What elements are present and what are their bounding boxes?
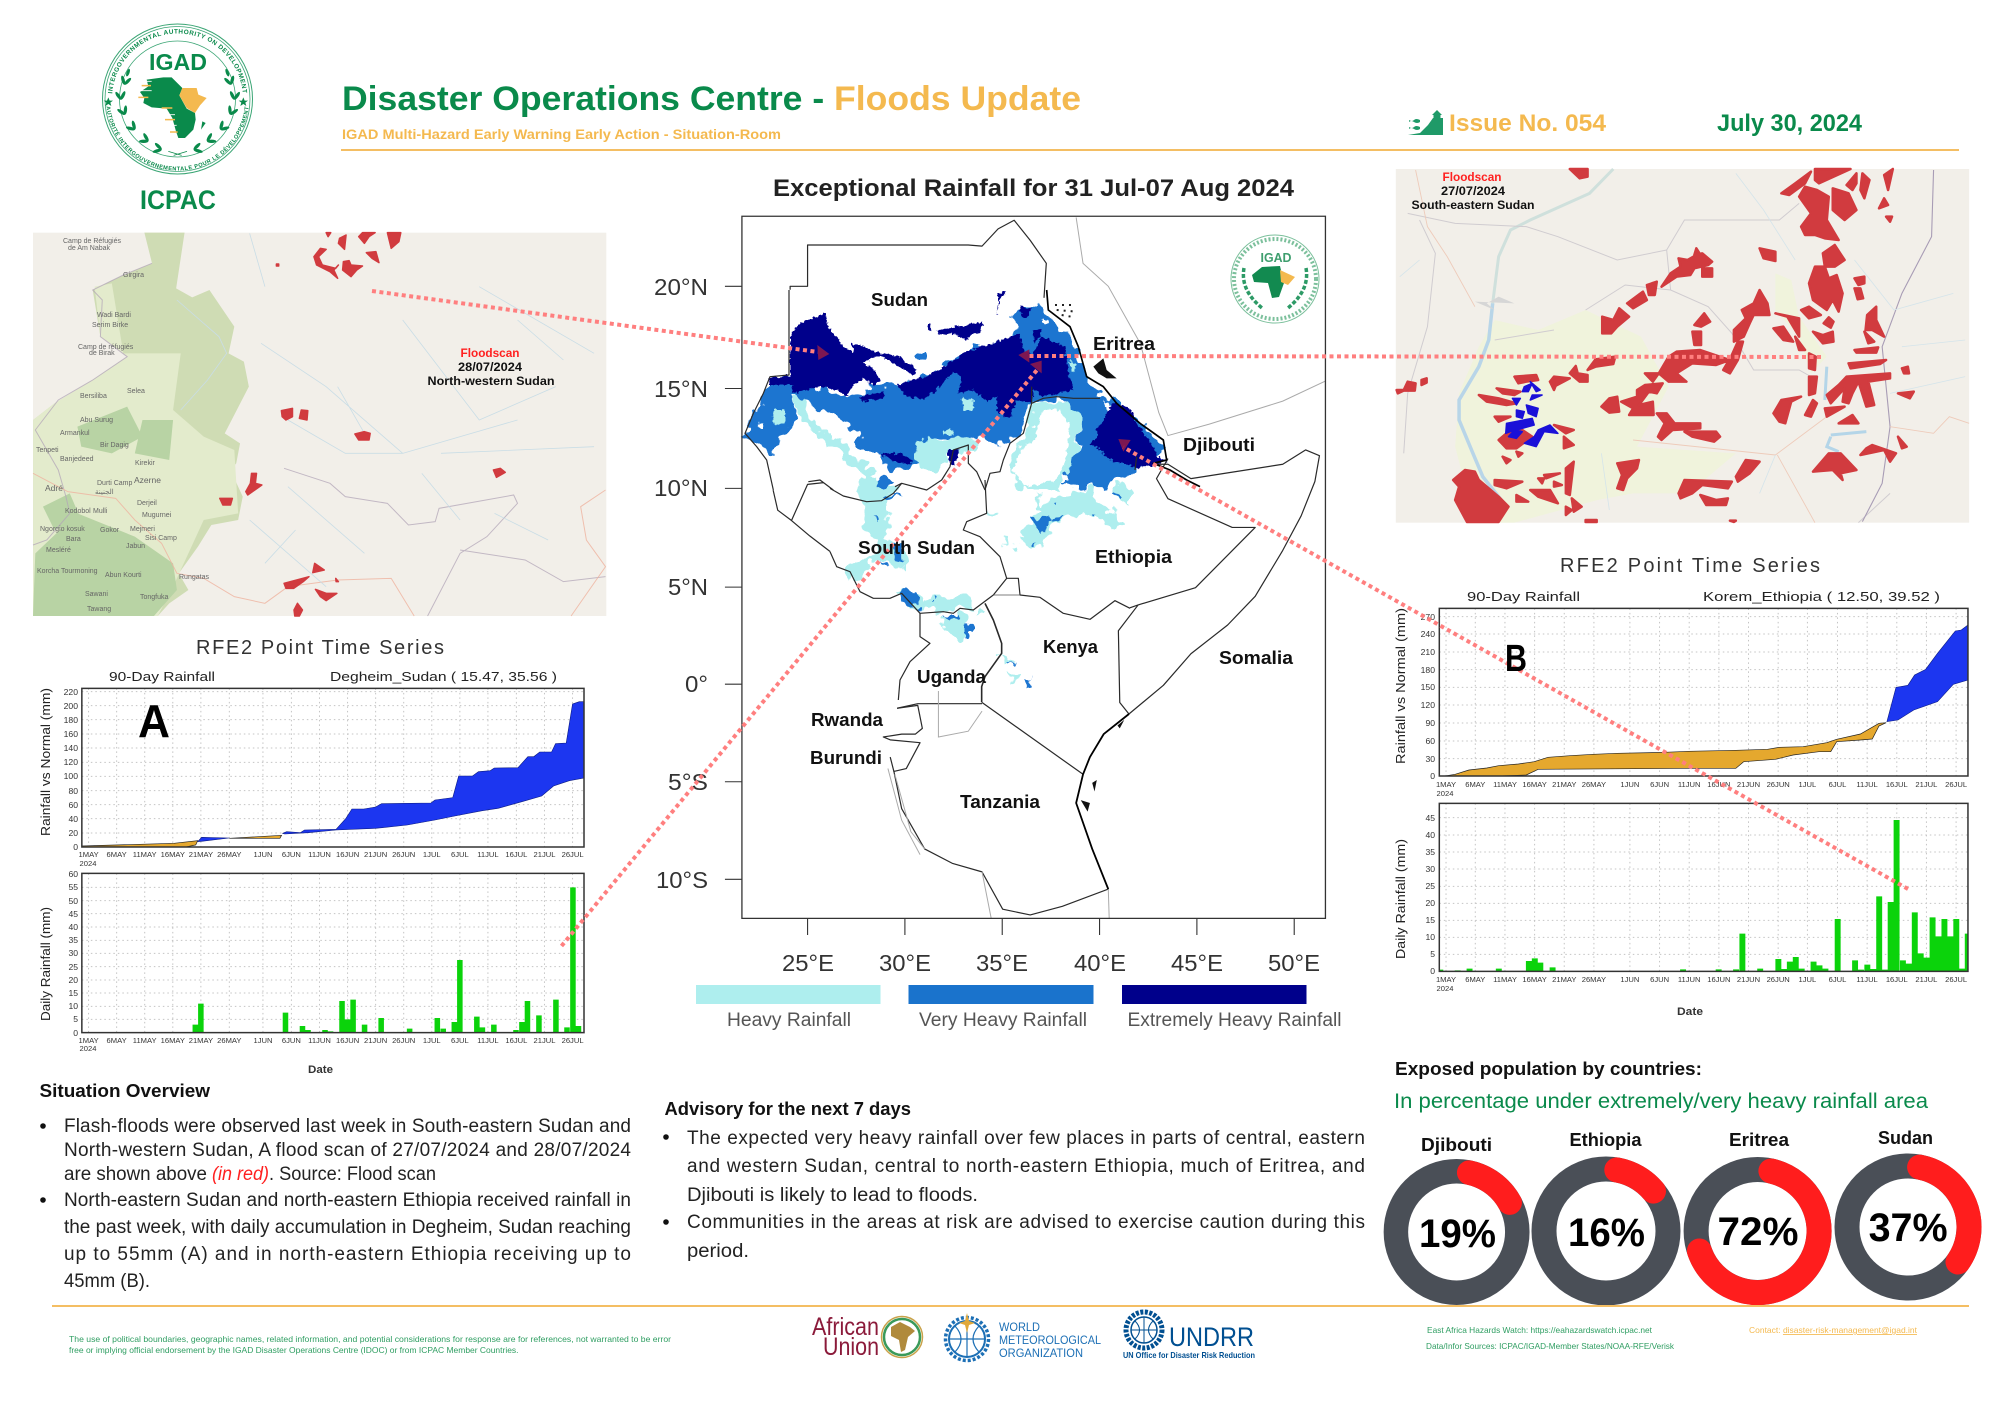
panel: chart A Degheim: 180 [64,715,78,725]
donut: Eritrea: 72% [1718,1210,1798,1254]
panel: chart A Degheim: 20 [68,975,78,985]
map country labels: Kenya [1043,637,1099,657]
logo: African Union: Union [823,1333,879,1361]
panel: floodscan map north-western Sudan: de Am Nabak [68,245,111,252]
axis tick labels chart B: 16MAY [1522,780,1547,789]
map axis labels: 5°N [668,574,708,600]
axis tick labels chart A: 16JUN [336,850,359,859]
panel: chart A Degheim: 0 [73,842,78,852]
panel: chart A Degheim: 80 [68,786,78,796]
axis tick labels chart B: 26JUN [1767,975,1790,984]
axis tick labels chart A: 26JUN [392,1036,415,1045]
heading: Advisory for the next 7 days [664,1098,911,1119]
legend: Extremely Heavy Rainfall [1128,1010,1342,1031]
rainfall: heavy [793,398,1130,685]
logo: African Union: African [812,1313,879,1341]
axis tick labels chart A: 26JUN [392,850,415,859]
panel: chart B Korem: 90 [1425,718,1435,728]
panel: floodscan map north-western Sudan: Sisi Camp [145,535,177,542]
map axis labels: 10°N [654,475,708,501]
donut: Djibouti: 19% [1419,1212,1496,1256]
panel: chart B Korem: 35 [1425,847,1435,857]
map axis labels: 10°S [656,867,708,893]
disclaimer: free or implying official endorsement by the IGAD Disaster Operations Centre (IDOC) or from ICPAC Member Countries. [69,1345,518,1355]
panel: chart B Korem: 270 [1421,612,1435,622]
map axis labels: 45°E [1171,950,1223,976]
axis titles chart A: Date [308,1064,333,1076]
panel: floodscan map south-eastern Sudan [1396,169,1969,523]
axis titles chart B: Daily Rainfall (mm) [1393,839,1408,959]
donut: Djibouti [1396,1134,1517,1293]
disclaimer: The use of political boundaries, geographic names, related information, and potential considerations for response are for references, not warranted to be error [69,1334,671,1344]
panel: chart B Korem: 15 [1425,915,1435,925]
panel: floodscan map north-western Sudan: Banjedeed [60,456,94,463]
map country labels: Eritrea [1093,334,1156,354]
panel: floodscan map north-western Sudan: Kodobol [65,508,91,515]
axis tick labels chart A: 16MAY [161,1036,185,1045]
legend [696,985,1342,1031]
axis tick labels chart B: 11MAY [1493,780,1517,789]
axis tick labels chart A: 11MAY [133,1036,157,1045]
panel: floodscan map north-western Sudan: Tawang [87,606,111,613]
rainfall: gaps inside very heavy [758,318,1122,435]
axis tick labels chart B: 11JUL [1856,975,1878,984]
axis tick labels chart B: 1MAY [1436,975,1456,984]
axis tick labels chart B: 21MAY [1552,780,1576,789]
axis tick labels chart B: 1MAY [1436,780,1456,789]
axis tick labels chart B: 6JUN [1650,975,1669,984]
donut: Eritrea [1696,1129,1819,1293]
panel: advisory: The expected very heavy rainfall over few places in parts of central, eastern [687,1128,1365,1149]
subheading: In percentage under extremely/very heavy rainfall area [1394,1090,1928,1113]
panel: situation overview: North-western Sudan, A flood scan of 27/07/2024 and 28/07/2024 [64,1140,631,1161]
axis tick labels chart A: 26MAY [217,1036,241,1045]
title: Disaster Operations Centre - Floods Update [342,80,1081,118]
panel: floodscan map north-western Sudan: Abu Surug [80,417,113,424]
map country labels [810,290,1294,812]
map label: Floodscan north-western Sudan: Floodscan [460,348,520,360]
axis tick labels chart B: 26MAY [1582,780,1606,789]
panel: floodscan map north-western Sudan: الجنينة [95,488,114,496]
axis tick labels chart A: 6JUN [282,850,301,859]
axis tick labels chart A: 16JUL [505,1036,527,1045]
map inset logo [1231,235,1319,323]
axis tick labels chart B: 16JUN [1707,780,1731,789]
axis tick labels chart A: 2024 [80,859,96,868]
panel: chart A Degheim: 160 [64,729,78,739]
axis tick labels chart A: 21JUL [534,1036,555,1045]
arrow: north-western Sudan to map [372,291,818,352]
panel: chart B Korem: 10 [1425,932,1435,942]
donut: Djibouti: Djibouti [1421,1134,1492,1155]
footer links: Data/Infor Sources: ICPAC/IGAD-Member States/NOAA-RFE/Verisk [1426,1341,1675,1351]
footer links: Contact: disaster-risk-management@igad.int [1749,1325,1918,1335]
map label: Floodscan south-eastern Sudan: 27/07/2024 [1441,186,1506,198]
panel: chart B Korem: 180 [1421,665,1435,675]
axis tick labels chart A: 21JUL [534,850,555,859]
axis tick labels chart A: 26JUL [562,1036,584,1045]
axis tick labels chart A: 21MAY [189,850,213,859]
subtitle: IGAD Multi-Hazard Early Warning Early Action - Situation-Room [342,126,781,142]
donut: Eritrea: Eritrea [1729,1129,1790,1150]
panel: floodscan map north-western Sudan: Camp de Réfugiés [63,238,121,245]
panel: situation overview: the past week, with daily accumulation in Degheim, Sudan reaching [64,1217,631,1238]
axis tick labels chart B: 16JUN [1707,975,1731,984]
axis tick labels chart A: 6JUL [451,850,469,859]
panel: chart B Korem: 0 [1430,966,1435,976]
panel: floodscan map north-western Sudan: Bara [66,536,81,543]
panel: chart B Korem: 30 [1425,864,1435,874]
panel: floodscan map north-western Sudan: de Birak [89,350,115,357]
axis tick labels chart A: 1JUL [423,850,441,859]
axis tick labels chart A: 6MAY [107,1036,127,1045]
panel: floodscan map north-western Sudan: Mesléré [46,547,71,554]
donut: Ethiopia: Ethiopia [1570,1129,1642,1150]
panel: floodscan map north-western Sudan: Selea [127,388,145,395]
map axis labels: 50°E [1268,950,1320,976]
axis tick labels chart B: 21JUN [1737,975,1760,984]
map axis labels: 40°E [1074,950,1126,976]
issue number: Issue No. 054 [1449,110,1607,137]
panel: floodscan map north-western Sudan: Sawani [85,591,108,598]
logo label: ICPAC: ICPAC [140,185,216,215]
panel: floodscan map north-western Sudan: Durti Camp [97,480,133,487]
arrow: chart A to map [562,370,1037,946]
panel: floodscan map north-western Sudan: Rungatas [179,574,209,581]
axis tick labels chart B: 1JUN [1620,780,1639,789]
axis tick labels chart A: 21JUN [364,1036,387,1045]
panel: chart A Degheim: 55 [68,882,78,892]
axis tick labels chart B: 26JUL [1945,780,1967,789]
panel: advisory: and western Sudan, central to north-eastern Ethiopia, much of Eritrea, and [687,1156,1365,1177]
panel: chart A Degheim: 140 [64,743,78,753]
panel: chart B Korem: 210 [1421,647,1435,657]
panel: chart A Degheim: 90-Day Rainfall [109,669,215,684]
panel: floodscan map north-western Sudan: Camp de réfugiés [78,344,134,351]
panel: chart B Korem [1393,555,1968,1018]
panel: chart A Degheim: 40 [68,922,78,932]
axis tick labels chart A: 2024 [80,1044,96,1053]
footer links [1426,1325,1918,1351]
map country labels: Djibouti [1183,435,1255,455]
axis tick labels chart B: 6JUL [1829,975,1846,984]
panel: floodscan map north-western Sudan: Mulli [93,508,108,515]
cumulative rainfall chart [82,688,584,847]
axis tick labels chart B: 26JUL [1945,975,1967,984]
axis tick labels chart A: 6JUL [451,1036,469,1045]
map axis labels: 30°E [879,950,931,976]
panel: exposed population [1394,1058,1969,1293]
axis tick labels chart A: 16JUL [505,850,527,859]
panel: chart A Degheim: 30 [68,948,78,958]
panel: chart B Korem: 25 [1425,881,1435,891]
axis tick labels chart A: 1JUN [254,850,272,859]
panel: floodscan map north-western Sudan: Ngorgio kosuk [40,526,85,533]
panel: floodscan map north-western Sudan [33,233,606,616]
panel: floodscan map north-western Sudan: Mejmeri [130,526,155,533]
donut: Ethiopia: 16% [1568,1211,1645,1255]
axis tick labels chart B: 16JUL [1886,780,1908,789]
panel: floodscan map north-western Sudan: Azerne [134,475,161,485]
panel: situation overview: 45mm (B). [64,1271,150,1292]
panel: chart B Korem: 45 [1425,813,1435,823]
logo: IGAD emblem [102,24,253,174]
map background [742,216,1326,918]
panel: chart A Degheim: 10 [68,1001,78,1011]
panel: chart A Degheim: 5 [73,1014,78,1024]
axis tick labels chart A: 6JUN [282,1036,301,1045]
country borders [745,220,1319,915]
axis titles chart A: Daily Rainfall (mm) [38,907,53,1021]
axis tick labels chart B: 6JUN [1650,780,1669,789]
panel: chart A Degheim: Degheim_Sudan ( 15.47, 35.56 ) [330,669,557,684]
axis tick labels chart B: 11MAY [1493,975,1517,984]
map country labels: South Sudan [858,538,975,558]
axis tick labels chart B: 1JUL [1799,975,1816,984]
panel: chart B Korem: 5 [1430,949,1435,959]
logo: UNDRR: UN Office for Disaster Risk Reduction [1123,1350,1255,1360]
chart marker A: A [138,695,170,747]
map axis labels: 25°E [782,950,834,976]
axis tick labels chart B: 21MAY [1552,975,1576,984]
axis tick labels chart A: 1MAY [79,850,99,859]
chart title: RFE2 Point Time Series [1560,555,1820,577]
map label: Floodscan south-eastern Sudan [1412,172,1534,212]
map label: Floodscan south-eastern Sudan: Floodscan [1442,172,1502,184]
panel: floodscan map north-western Sudan: Armankul [60,430,90,437]
panel: chart A Degheim: 15 [68,988,78,998]
panel: chart A Degheim: 50 [68,896,78,906]
axis tick labels chart A: 11JUL [477,850,499,859]
logo: World Meteorological Organization: WORLD [999,1320,1040,1334]
axis tick labels chart A: 1JUN [254,1036,272,1045]
panel: exceptional rainfall map [654,175,1342,1031]
panel: advisory: period. [687,1241,749,1262]
map title: Exceptional Rainfall for 31 Jul-07 Aug 2024 [773,175,1295,202]
logo: World Meteorological Organization: METEOROLOGICAL [999,1333,1101,1347]
panel: chart B Korem: 90-Day Rainfall [1467,589,1580,604]
panel: situation overview: are shown above [64,1164,207,1185]
map country labels: Burundi [810,748,882,768]
disclaimer [69,1334,671,1355]
axis tick labels chart A: 6MAY [107,850,127,859]
panel: situation overview: Flash-floods were observed last week in South-eastern Sudan and [64,1116,631,1137]
logo: IGAD emblem: INTERGOVERNMENTAL AUTHORITY ON DEVELOPMENT [108,29,248,94]
panel: floodscan map north-western Sudan: Gokor [100,527,120,534]
panel: situation overview: (in red) [212,1164,269,1185]
logo: IGAD emblem: AUTORITÉ INTERGOUVERNEMENTALE POUR LE DÉVELOPPEMENT [106,106,248,170]
axis tick labels chart A: 11JUN [308,1036,331,1045]
logo: World Meteorological Organization: ORGANIZATION [999,1346,1083,1360]
map label: Floodscan north-western Sudan: North-western Sudan [428,376,554,388]
legend: Very Heavy Rainfall [919,1010,1087,1031]
panel: chart A Degheim: 220 [64,687,78,697]
panel: chart A Degheim: 25 [68,962,78,972]
arrow: chart B to map [1123,447,1908,889]
panel: chart B Korem: 120 [1421,700,1435,710]
rainfall: very heavy [745,305,1165,687]
panel: situation overview: North-eastern Sudan and north-eastern Ethiopia received rainfall in [64,1190,631,1211]
axis tick labels chart B: 26JUN [1767,780,1790,789]
map axis labels: 35°E [976,950,1028,976]
daily rainfall bar chart [82,873,584,1033]
rainfall: extremely heavy [768,292,1167,468]
panel: chart A Degheim: 60 [68,800,78,810]
panel: chart B Korem: 0 [1430,771,1435,781]
panel: floodscan map north-western Sudan: Bir Dagig [100,442,129,449]
map country labels: Rwanda [811,710,884,730]
date: July 30, 2024 [1717,110,1863,137]
panel: floodscan map north-western Sudan: Derjeil [137,500,157,507]
map country labels: Sudan [871,290,928,310]
panel: chart A Degheim: 0 [73,1028,78,1038]
chart marker B: B [1505,638,1527,680]
arrow: south-eastern Sudan to map [1029,356,1821,357]
panel: chart B Korem: 20 [1425,898,1435,908]
panel: floodscan map north-western Sudan: Bersiliba [80,393,107,400]
axis tick labels chart B: 6JUL [1829,780,1846,789]
heading: Exposed population by countries: [1395,1058,1702,1079]
panel: chart B Korem: 40 [1425,830,1435,840]
axis tick labels chart A: 26JUL [562,850,584,859]
axis titles chart A [38,688,333,1076]
panel: chart A Degheim: 45 [68,909,78,919]
axis tick labels chart B: 6MAY [1465,780,1485,789]
map inset logo: IGAD [1260,251,1292,265]
arrow heads [817,345,1131,452]
axis tick labels chart A: 1MAY [79,1036,99,1045]
cumulative rainfall chart [1439,608,1968,776]
logo: IGAD emblem: IGAD [149,49,207,75]
panel: floodscan map north-western Sudan: Jabun [126,543,145,550]
donut: Sudan: 37% [1869,1206,1948,1250]
axis tick labels chart A: 16JUN [336,1036,359,1045]
axis tick labels chart B: 16JUL [1886,975,1908,984]
panel: advisory: Communities in the areas at risk are advised to exercise caution during this [687,1212,1365,1233]
map label: Floodscan north-western Sudan: 28/07/2024 [458,362,523,374]
axis tick labels chart B: 21JUL [1915,780,1937,789]
axis tick labels chart A: 26MAY [217,850,241,859]
axis tick labels chart A: 11MAY [133,850,157,859]
axis tick labels chart B: 26MAY [1582,975,1606,984]
donut: Sudan [1847,1127,1969,1288]
axis tick labels chart A [79,850,584,1053]
panel: advisory [663,1098,1365,1262]
map axis labels: 5°S [668,769,708,795]
axis titles chart B [1393,608,1703,1018]
map axis labels: 20°N [654,274,708,300]
axis titles chart B: Date [1677,1006,1703,1018]
axis tick labels chart B [1436,780,1967,993]
panel: chart B Korem: 240 [1421,629,1435,639]
panel: floodscan map north-western Sudan: Adré [45,483,63,493]
axis tick labels chart B: 1JUN [1620,975,1639,984]
bullets [40,1123,46,1129]
axis tick labels chart B: 6MAY [1465,975,1485,984]
axis tick labels chart B: 21JUL [1915,975,1937,984]
map country labels: Somalia [1219,648,1294,668]
daily rainfall bar chart [1439,803,1968,971]
map axis labels: 0° [685,671,708,697]
map neighbouring outlines [725,216,1325,935]
donut: Ethiopia [1544,1129,1668,1293]
panel: floodscan map north-western Sudan: Serim Birke [92,322,128,329]
panel: floodscan map north-western Sudan: Abun Kourti [105,572,142,579]
map axis labels: 15°N [654,376,708,402]
panel: chart A Degheim: 120 [64,757,78,767]
chart title: RFE2 Point Time Series [196,637,444,659]
axis tick labels chart A: 21MAY [189,1036,213,1045]
panel: floodscan map north-western Sudan: Korcha Tourmoning [37,568,98,575]
panel: situation overview: up to 55mm (A) and in north-eastern Ethiopia receiving up to [64,1244,631,1265]
panel: chart B Korem: Korem_Ethiopia ( 12.50, 39.52 ) [1703,589,1940,604]
axis tick labels chart A: 11JUN [308,850,331,859]
logo: UNDRR [1123,1312,1255,1360]
legend: Heavy Rainfall [727,1010,851,1031]
panel: chart A Degheim: 20 [68,828,78,838]
map country labels: Ethiopia [1095,547,1173,567]
axis titles chart A: Rainfall vs Normal (mm) [38,688,53,836]
panel: situation overview [40,1080,631,1292]
panel: floodscan map north-western Sudan: Tongfuka [140,594,169,601]
panel: chart A Degheim: 35 [68,935,78,945]
axis tick labels chart A: 16MAY [161,850,185,859]
panel: chart A Degheim: 60 [68,869,78,879]
panel: advisory: Djibouti is likely to lead to floods. [687,1185,978,1206]
map label: Floodscan south-eastern Sudan: South-eastern Sudan [1412,200,1534,212]
logo: World Meteorological Organization [946,1313,1101,1360]
donut: Sudan: Sudan [1878,1127,1933,1148]
map country labels: Tanzania [960,792,1041,812]
axis tick labels chart A: 11JUL [477,1036,499,1045]
panel: chart A Degheim: 200 [64,701,78,711]
map label: Floodscan north-western Sudan [428,348,554,388]
panel: chart B Korem: 60 [1425,736,1435,746]
axis titles chart B: Rainfall vs Normal (mm) [1393,608,1408,764]
axis tick labels chart B: 2024 [1437,984,1453,993]
logo: UNDRR: UNDRR [1169,1322,1254,1352]
axis tick labels chart B: 11JUN [1678,780,1701,789]
axis tick labels chart B: 11JUL [1856,780,1878,789]
axis tick labels chart A: 21JUN [364,850,387,859]
panel: chart A Degheim [38,637,584,1076]
panel: chart A Degheim: 100 [64,771,78,781]
panel: floodscan map north-western Sudan: Wadi Bardi [97,312,131,319]
panel: floodscan map north-western Sudan: Mugurnei [142,512,172,519]
axis tick labels chart B: 16MAY [1522,975,1547,984]
panel: floodscan map north-western Sudan: Girgira [123,272,144,279]
axis tick labels chart B: 2024 [1437,789,1453,798]
panel: situation overview: . Source: Flood scan [269,1164,436,1185]
icon: flood waves and house [1408,110,1443,135]
panel: floodscan map north-western Sudan: Kirekir [135,460,156,467]
axis tick labels chart B: 21JUN [1737,780,1760,789]
axis tick labels chart B: 1JUL [1799,780,1816,789]
axis tick labels chart A: 1JUL [423,1036,441,1045]
panel: floodscan map north-western Sudan: Tenpeti [36,447,59,454]
footer links: East Africa Hazards Watch: https://eahazardswatch.icpac.net [1427,1325,1653,1335]
map country labels: Uganda [917,667,987,687]
map axis labels [654,274,1320,976]
axis tick labels chart B: 11JUN [1678,975,1701,984]
panel: chart A Degheim: 40 [68,814,78,824]
heading: Situation Overview [40,1080,211,1101]
panel: chart B Korem: 30 [1425,754,1435,764]
panel: chart B Korem: 150 [1421,682,1435,692]
logo: African Union [812,1313,922,1361]
rainfall: white gaps inside heavy [825,408,1070,487]
